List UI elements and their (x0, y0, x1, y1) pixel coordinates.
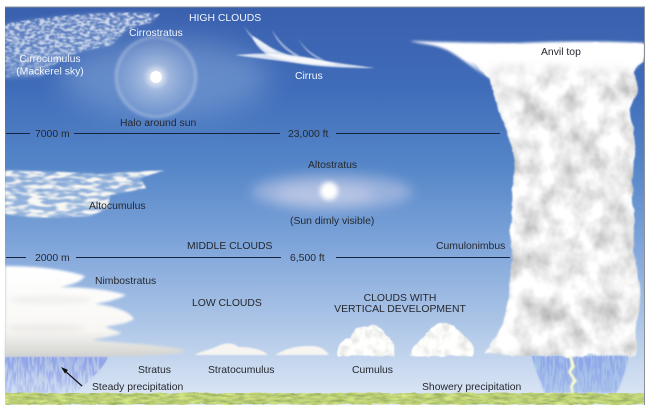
cloud: stratocumulus (194, 343, 329, 355)
cloud: cumulus small (338, 326, 395, 356)
label: cumulus: Cumulus (352, 365, 393, 376)
label: altocumulus: Altocumulus (89, 201, 146, 212)
cloud: altostratus with dim sun (252, 174, 412, 210)
label: cirrus: Cirrus (295, 71, 323, 82)
label: cumulonimbus: Cumulonimbus (436, 241, 505, 252)
label: cirrocumulus: (Mackerel sky) (16, 66, 84, 78)
lightning bolt (568, 356, 577, 398)
heading: low clouds: LOW CLOUDS (192, 298, 262, 309)
label: anvil top: Anvil top (541, 47, 581, 58)
altitude line: 2000 m / 6,500 ft (6, 256, 510, 258)
label: 6,500 ft: 6,500 ft (290, 253, 325, 264)
label: showery precipitation: Showery precipitation (422, 382, 522, 393)
cloud: cumulus large (409, 323, 474, 356)
ground: grass (5, 393, 644, 404)
label: stratus: Stratus (138, 365, 171, 376)
label: 7000 m: 7000 m (35, 129, 70, 140)
heading: clouds with vertical development: CLOUDS WITH (364, 293, 436, 304)
cloud: nimbostratus and stratus (5, 266, 186, 357)
cloud: cirrocumulus (5, 12, 160, 78)
label: halo around sun: Halo around sun (120, 118, 196, 129)
arrow: steady precipitation (61, 367, 82, 386)
label: altostratus: Altostratus (308, 160, 357, 171)
cloud: cumulonimbus tower (410, 41, 644, 355)
label: steady precipitation: Steady precipitation (92, 382, 183, 393)
heading: middle clouds: MIDDLE CLOUDS (187, 241, 273, 252)
rain: showery precipitation (532, 356, 628, 393)
rain: steady precipitation (5, 357, 108, 393)
cloud: altocumulus (5, 170, 165, 218)
label: 2000 m: 2000 m (35, 253, 70, 264)
label: stratocumulus: Stratocumulus (208, 365, 274, 376)
heading: clouds with vertical development: VERTICAL DEVELOPMENT (334, 304, 466, 315)
heading: high clouds: HIGH CLOUDS (189, 13, 261, 24)
label: cirrostratus: Cirrostratus (129, 28, 183, 39)
cloud: cirrus (235, 26, 375, 68)
label: 23,000 ft: 23,000 ft (288, 129, 329, 140)
label: nimbostratus: Nimbostratus (95, 276, 156, 287)
cloud: cirrostratus halo around sun (60, 35, 270, 119)
anvil top (410, 41, 644, 80)
label: sun dimly visible: (Sun dimly visible) (290, 216, 374, 227)
altitude line: 7000 m / 23,000 ft (6, 132, 500, 134)
label: cirrocumulus: Cirrocumulus (19, 54, 81, 65)
